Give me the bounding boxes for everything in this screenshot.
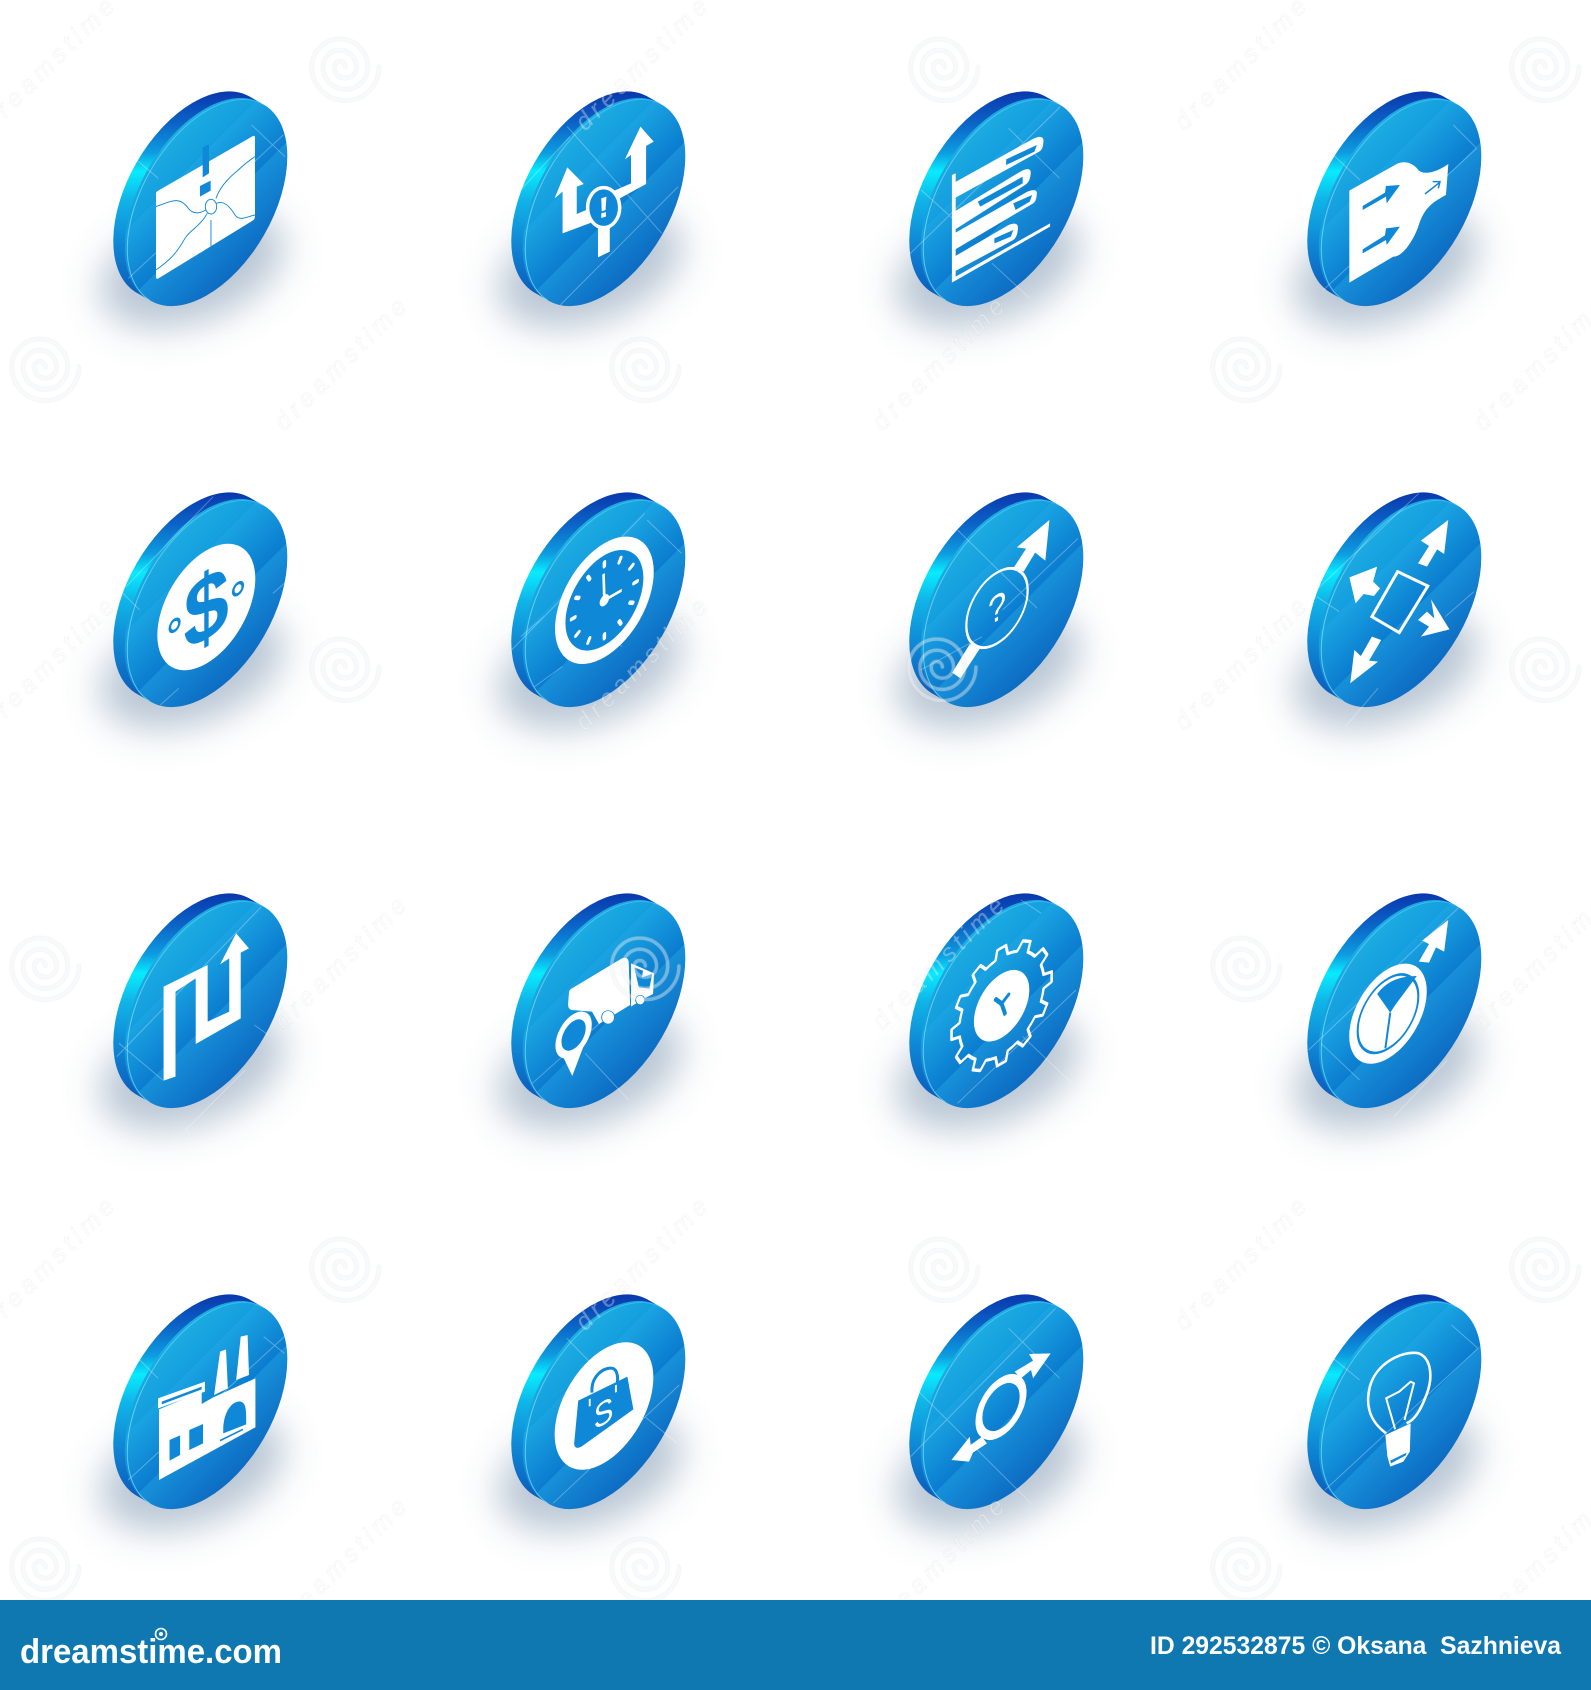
pie arrow symbol [1309, 907, 1460, 1117]
disc icon: factory [83, 1294, 301, 1555]
bulb symbol [1325, 1325, 1478, 1490]
question arrow symbol [921, 520, 1078, 678]
question ring [966, 555, 1028, 661]
disc icon: delivery truck with location pin [481, 893, 699, 1154]
watermark text: dreamstime [269, 1493, 412, 1636]
disc icon: zigzag route arrow [83, 893, 301, 1154]
chart symbol [907, 107, 1060, 298]
coin symbol [157, 522, 255, 692]
gear symbol [952, 919, 1052, 1092]
location pin ring [558, 1009, 589, 1061]
disc icon: dollar coin [83, 492, 301, 753]
watermark text: dreamstime [570, 593, 713, 736]
disc icon: wind flow sheet [1277, 91, 1495, 352]
watermark text: dreamstime [269, 293, 412, 436]
footer credit: ID 292532875 © Oksana Sazhnieva [1150, 1632, 1562, 1660]
factory symbol [128, 1335, 284, 1480]
disc icon: ring with two-way arrow [879, 1294, 1097, 1555]
zigzag arrow symbol [117, 907, 268, 1130]
two-way arrow symbol [911, 1308, 1060, 1503]
watermark text: dreamstime [867, 1493, 1010, 1636]
watermark text: dreamstime [1169, 593, 1312, 736]
forking arrows symbol [518, 127, 678, 305]
watermark text: dreamstime [1169, 1193, 1312, 1336]
disc icon: rectangle with four arrows [1277, 492, 1495, 753]
bag body [574, 1368, 633, 1448]
coin symbol: $ [184, 542, 229, 673]
disc icon: road fork with warning [481, 91, 699, 352]
question ring: ? [988, 583, 1006, 635]
disc icon: gear with wrench [879, 893, 1097, 1154]
four arrows symbol [1313, 493, 1474, 727]
disc icon: wall clock [481, 492, 699, 753]
map symbol [128, 125, 285, 279]
truck symbol [532, 958, 654, 1100]
pie wedge [1377, 976, 1417, 1048]
pie disc [1349, 946, 1427, 1081]
disc icon: money bag badge [481, 1294, 699, 1555]
footer logo: dreamstime.com [20, 1633, 282, 1671]
watermark text: dreamstime [867, 293, 1010, 436]
disc icon: light bulb [1277, 1294, 1495, 1555]
bag symbol [555, 1320, 653, 1492]
flow shape with arrows [1323, 125, 1477, 290]
watermark text: dreamstime [570, 1193, 713, 1336]
disc icon: pie chart with arrow [1277, 893, 1495, 1154]
footer bar [0, 1600, 1591, 1690]
bag S mark: S [594, 1389, 613, 1438]
disc icon: map with route [83, 91, 301, 352]
ring [979, 1369, 1023, 1445]
watermark text: dreamstime [867, 892, 1010, 1035]
disc icon: gantt bar chart [879, 91, 1097, 352]
watermark text: dreamstime [269, 892, 412, 1035]
clock symbol [560, 524, 649, 677]
disc icon: question magnifier with arrow [879, 492, 1097, 753]
